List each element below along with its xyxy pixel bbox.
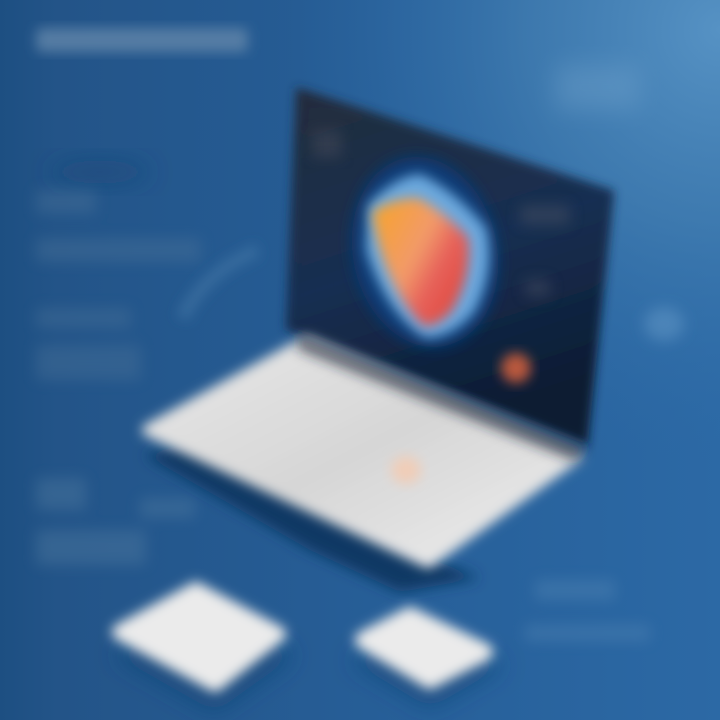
shield dark halo: [335, 143, 515, 361]
icon: small orange dot on screen: [501, 353, 531, 383]
trackpad mark: [391, 456, 421, 484]
text block: middle left: [36, 308, 141, 380]
dark patch behind upper left text: [50, 160, 150, 184]
shield halo: [366, 174, 489, 338]
text block: lower left: [36, 478, 195, 565]
laptop screen: [288, 90, 612, 442]
device tile: left: [115, 590, 295, 712]
arrow: faint curve to laptop: [182, 250, 258, 318]
hinge shadow: [298, 332, 588, 462]
screen content: left column: [312, 130, 342, 158]
text block: upper left: [36, 190, 201, 262]
left tile shadow: [115, 610, 295, 712]
text block: upper right: [555, 65, 640, 110]
right tile: [364, 616, 484, 680]
icon: faint right badge: [644, 307, 684, 341]
icon: shield: [372, 198, 469, 326]
device tile: right: [350, 616, 505, 708]
left tile: [120, 590, 278, 684]
laptop shadow: [145, 440, 480, 592]
laptop base: [148, 342, 576, 562]
right tile shadow: [350, 630, 505, 708]
title: blurred heading: [36, 28, 248, 52]
screen content: right column: [520, 205, 570, 296]
laptop: [145, 90, 612, 592]
text block: lower right: [525, 580, 650, 641]
